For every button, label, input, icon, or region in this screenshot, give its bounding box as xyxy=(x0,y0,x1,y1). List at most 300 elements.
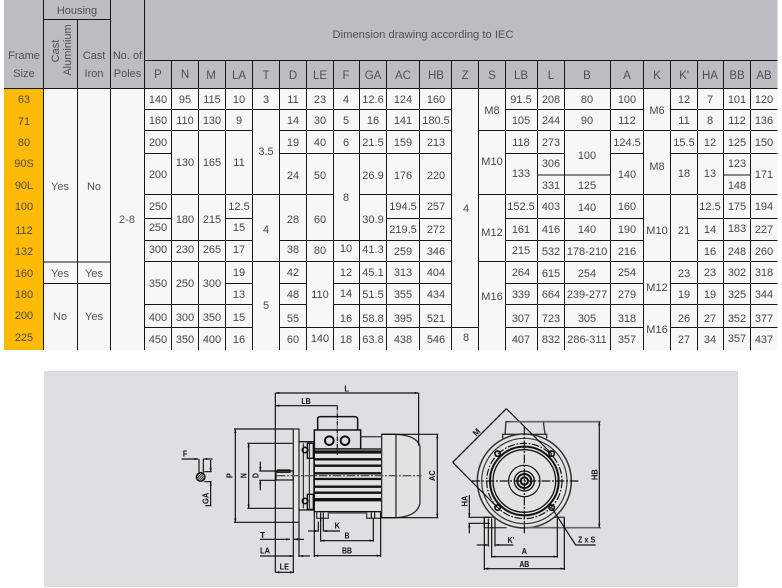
terminal box xyxy=(314,417,382,449)
values: T to HB: 30.9 xyxy=(362,214,384,226)
values: P to LA: 15 xyxy=(233,222,245,234)
values: T to HB: 16 xyxy=(340,313,352,325)
front view dimension lines xyxy=(453,409,601,570)
values: T to HB: 51.5 xyxy=(362,289,384,301)
values: T to HB: 355 xyxy=(394,289,412,301)
side view dimension labels: BB xyxy=(342,546,352,556)
side view dimension labels: L xyxy=(344,383,350,393)
values: Z to A: 216 xyxy=(618,246,636,258)
values: P to LA: 15 xyxy=(233,312,245,324)
side view dimension labels: LE xyxy=(280,561,289,571)
diagram: side view of motor xyxy=(182,383,438,572)
frame sizes: 180 xyxy=(15,289,33,301)
values: T to HB: 159 xyxy=(394,137,412,149)
column headers: AB xyxy=(756,70,772,82)
values: Z to A: M12 xyxy=(481,227,503,239)
values: T to HB: 176 xyxy=(394,170,412,182)
values: P to LA: 160 xyxy=(149,115,167,127)
values: P to LA: 11 xyxy=(233,157,245,169)
values: T to HB: 219.5 xyxy=(389,224,417,236)
values: P to LA: 12.5 xyxy=(228,201,250,213)
column headers: K xyxy=(653,70,661,82)
side view dimension labels: T xyxy=(260,530,266,540)
values: P to LA: 200 xyxy=(149,137,167,149)
values: Z to A: 318 xyxy=(618,313,636,325)
values: K to AB: 148 xyxy=(728,180,746,192)
values: Z to A: 215 xyxy=(512,245,530,257)
values: T to HB: 521 xyxy=(427,313,445,325)
values: Z to A: 339 xyxy=(512,289,530,301)
housing and poles values: 2-8 xyxy=(119,214,135,226)
values: Z to A: 279 xyxy=(618,289,636,301)
values: K to AB: 248 xyxy=(728,246,746,258)
values: T to HB: 141 xyxy=(394,115,412,127)
values: T to HB: 438 xyxy=(394,334,412,346)
column headers: LB xyxy=(514,70,528,82)
values: T to HB: 434 xyxy=(427,289,445,301)
values: P to LA: 350 xyxy=(203,312,221,324)
values: P to LA: 350 xyxy=(176,334,194,346)
values: Z to A: 4 xyxy=(463,203,469,215)
values: T to HB: 11 xyxy=(287,94,299,106)
column headers: AC xyxy=(395,70,411,82)
table: dimensions xyxy=(4,0,778,350)
values: T to HB: 5 xyxy=(263,300,269,312)
side view dimension labels: LB xyxy=(301,396,311,406)
values: K to AB: 437 xyxy=(755,334,773,346)
side view dimension labels: P xyxy=(225,473,235,478)
column headers: Z xyxy=(461,70,469,82)
values: Z to A: 307 xyxy=(512,313,530,325)
frame sizes: 100 xyxy=(15,201,33,213)
column headers: T xyxy=(262,70,270,82)
values: K to AB: 125 xyxy=(728,137,746,149)
grid lines xyxy=(4,0,778,350)
values: P to LA: 250 xyxy=(176,278,194,290)
frame sizes: 112 xyxy=(15,225,33,237)
values: T to HB: 55 xyxy=(287,313,299,325)
values: Z to A: 273 xyxy=(542,137,560,149)
values: K to AB: 23 xyxy=(704,267,716,279)
values: Z to A: 723 xyxy=(542,313,560,325)
front view dimension labels: Z x S xyxy=(578,534,596,544)
table body background xyxy=(44,88,778,350)
values: T to HB: 3 xyxy=(263,94,269,106)
values: T to HB: 16 xyxy=(367,115,379,127)
values: Z to A: M10 xyxy=(481,156,503,168)
frame sizes: 71 xyxy=(18,116,30,128)
column headers: LA xyxy=(232,70,246,82)
values: K to AB: 150 xyxy=(755,137,773,149)
values: T to HB: 110 xyxy=(311,289,329,301)
values: P to LA: 10 xyxy=(233,94,245,106)
values: Z to A: 90 xyxy=(581,115,593,127)
values: Z to A: 160 xyxy=(618,201,636,213)
values: T to HB: 180.5 xyxy=(422,115,450,127)
column headers: F xyxy=(342,70,350,82)
column headers: A xyxy=(623,70,631,82)
values: P to LA xyxy=(149,94,250,346)
values: T to HB: 140 xyxy=(311,333,329,345)
header labels: housing, frame, poles: Cast xyxy=(83,50,105,62)
flange rings xyxy=(477,434,571,528)
values: K to AB: 19 xyxy=(704,289,716,301)
housing and poles values: Yes xyxy=(51,181,69,193)
values: T to HB: 24 xyxy=(287,170,299,182)
values: T to HB: 259 xyxy=(394,246,412,258)
header labels: housing, frame, poles: Size xyxy=(13,68,35,80)
side view dimension labels: D xyxy=(250,473,260,478)
values: K to AB: 344 xyxy=(755,289,773,301)
values: K to AB: 260 xyxy=(755,246,773,258)
front view dimension labels: HA xyxy=(459,495,469,506)
values: T to HB: 60 xyxy=(287,334,299,346)
values: T to HB: 48 xyxy=(287,289,299,301)
values: K to AB: M8 xyxy=(649,161,665,173)
values: Z to A: M16 xyxy=(481,291,503,303)
column headers: D xyxy=(289,70,297,82)
values: K to AB: 7 xyxy=(707,94,713,106)
values: Z to A: 416 xyxy=(542,224,560,236)
values: Z to A: 254 xyxy=(578,268,596,280)
values: K to AB xyxy=(646,94,773,346)
values: T to HB xyxy=(258,94,450,346)
front view dimension labels: A xyxy=(522,546,528,556)
centre lines xyxy=(472,427,578,533)
values: T to HB: 8 xyxy=(343,192,349,204)
side view dimension labels: B xyxy=(344,531,349,541)
values: T to HB: 272 xyxy=(427,224,445,236)
values: P to LA: 450 xyxy=(149,334,167,346)
front view dimension labels: K' xyxy=(508,535,514,545)
values: K to AB: 12 xyxy=(704,137,716,149)
values: Z to A: 532 xyxy=(542,246,560,258)
values: K to AB: 302 xyxy=(728,267,746,279)
values: P to LA: 130 xyxy=(203,115,221,127)
values: P to LA: 130 xyxy=(176,157,194,169)
values: T to HB: 12 xyxy=(340,267,352,279)
values: Z to A: M8 xyxy=(484,105,500,117)
values: Z to A: 91.5 xyxy=(510,94,532,106)
values: K to AB: M10 xyxy=(646,225,668,237)
column headers: LE xyxy=(313,70,327,82)
values: T to HB: 404 xyxy=(427,267,445,279)
side view dimension labels: F xyxy=(183,449,187,459)
values: P to LA: 165 xyxy=(203,157,221,169)
column headers xyxy=(154,69,772,82)
values: Z to A: 152.5 xyxy=(507,201,535,213)
bolt holes xyxy=(495,451,554,510)
values: K to AB: 377 xyxy=(755,313,773,325)
values: Z to A: 407 xyxy=(512,334,530,346)
values: K to AB: 12 xyxy=(678,94,690,106)
values: P to LA: 400 xyxy=(203,334,221,346)
housing and poles values: No xyxy=(53,311,67,323)
values: K to AB: 227 xyxy=(755,224,773,236)
column headers: K' xyxy=(679,70,689,82)
housing and poles values: Yes xyxy=(85,311,103,323)
values: Z to A: 140 xyxy=(578,224,596,236)
values: Z to A: 254 xyxy=(618,267,636,279)
values: K to AB: 19 xyxy=(678,289,690,301)
values: Z to A: 124.5 xyxy=(613,137,641,149)
values: P to LA: 300 xyxy=(149,244,167,256)
values: Z to A xyxy=(463,94,641,346)
column headers: L xyxy=(548,70,555,82)
values: Z to A: 125 xyxy=(578,180,596,192)
values: K to AB: 194 xyxy=(755,201,773,213)
values: Z to A: 403 xyxy=(542,201,560,213)
values: Z to A: 664 xyxy=(542,289,560,301)
side view dimension labels: K xyxy=(335,521,341,531)
cooling fins xyxy=(314,449,382,512)
values: T to HB: 38 xyxy=(287,244,299,256)
values: Z to A: 133 xyxy=(512,168,530,180)
values: T to HB: 18 xyxy=(340,334,352,346)
values: T to HB: 45.1 xyxy=(362,267,384,279)
column headers: B xyxy=(583,70,591,82)
values: T to HB: 12.6 xyxy=(362,94,384,106)
values: Z to A: 190 xyxy=(618,224,636,236)
values: K to AB: 183 xyxy=(728,223,746,235)
header labels: housing, frame, poles: Iron xyxy=(85,68,103,80)
values: Z to A: 80 xyxy=(581,94,593,106)
values: Z to A: 239-277 xyxy=(567,289,607,301)
housing and poles values: Yes xyxy=(85,268,103,280)
values: T to HB: 160 xyxy=(427,94,445,106)
values: K to AB: 34 xyxy=(704,334,716,346)
column headers: HA xyxy=(702,70,718,82)
values: Z to A: 100 xyxy=(578,150,596,162)
header background xyxy=(4,0,778,88)
values: T to HB: 23 xyxy=(314,94,326,106)
terminal box outline xyxy=(503,422,547,438)
values: K to AB: 18 xyxy=(678,168,690,180)
side view dimension labels: AC xyxy=(427,470,437,481)
side view dimension labels: N xyxy=(238,473,248,478)
values: K to AB: 13 xyxy=(704,168,716,180)
values: K to AB: 175 xyxy=(728,201,746,213)
values: Z to A: 8 xyxy=(463,332,469,344)
values: P to LA: 215 xyxy=(203,214,221,226)
values: T to HB: 19 xyxy=(287,137,299,149)
values: T to HB: 213 xyxy=(427,137,445,149)
values: P to LA: 95 xyxy=(179,94,191,106)
column headers: GA xyxy=(365,70,382,82)
values: T to HB: 124 xyxy=(394,94,412,106)
values: T to HB: 5 xyxy=(343,115,349,127)
frame size column background xyxy=(4,88,44,350)
values: P to LA: 200 xyxy=(149,169,167,181)
values: K to AB: 15.5 xyxy=(673,137,695,149)
values: K to AB: 27 xyxy=(704,313,716,325)
values: Z to A: 615 xyxy=(542,268,560,280)
panel: drawing background xyxy=(44,371,738,587)
values: T to HB: 63.8 xyxy=(362,334,384,346)
frame sizes: 200 xyxy=(15,310,33,322)
values: P to LA: 13 xyxy=(233,289,245,301)
values: K to AB: 352 xyxy=(728,313,746,325)
column headers: BB xyxy=(729,70,745,82)
values: K to AB: 26 xyxy=(678,313,690,325)
values: Z to A: 178-210 xyxy=(567,246,607,258)
values: P to LA: 400 xyxy=(149,312,167,324)
column headers: M xyxy=(206,70,216,82)
column headers: N xyxy=(181,69,189,81)
header labels: housing, frame, poles: Poles xyxy=(114,68,142,80)
values: K to AB: 8 xyxy=(707,115,713,127)
values: P to LA: 110 xyxy=(176,115,194,127)
values: Z to A: 357 xyxy=(618,334,636,346)
frame sizes: 90L xyxy=(15,180,33,192)
frame sizes: 160 xyxy=(15,268,33,280)
values: K to AB: 21 xyxy=(678,225,690,237)
side view dimension labels: GA xyxy=(200,492,210,504)
header labels: housing, frame, poles: Frame xyxy=(8,50,40,62)
header labels: housing, frame, poles xyxy=(8,5,143,80)
values: K to AB: 123 xyxy=(728,158,746,170)
values: K to AB: 120 xyxy=(755,94,773,106)
values: K to AB: 101 xyxy=(728,94,746,106)
side view dimension labels xyxy=(183,383,437,571)
header labels: housing, frame, poles: Housing xyxy=(57,5,97,17)
values: P to LA: 300 xyxy=(203,278,221,290)
values: Z to A: 208 xyxy=(542,94,560,106)
values: T to HB: 4 xyxy=(263,224,269,236)
values: Z to A: 264 xyxy=(512,267,530,279)
values: P to LA: 300 xyxy=(176,312,194,324)
values: P to LA: 16 xyxy=(233,334,245,346)
dimension lines xyxy=(182,393,438,572)
values: P to LA: 180 xyxy=(176,214,194,226)
values: Z to A: 105 xyxy=(512,115,530,127)
housing and poles values xyxy=(51,181,135,323)
values: T to HB: 80 xyxy=(314,245,326,257)
values: Z to A: 305 xyxy=(578,313,596,325)
frame sizes: 132 xyxy=(15,246,33,258)
values: K to AB: M16 xyxy=(646,324,668,336)
feet xyxy=(317,512,381,522)
values: P to LA: 19 xyxy=(233,267,245,279)
values: K to AB: 12.5 xyxy=(699,201,721,213)
values: T to HB: 58.8 xyxy=(362,313,384,325)
frame sizes: 63 xyxy=(18,94,30,106)
front view dimension labels xyxy=(459,426,599,569)
values: K to AB: 27 xyxy=(678,334,690,346)
header labels: housing, frame, poles: Aluminium xyxy=(62,24,74,76)
values: T to HB: 395 xyxy=(394,313,412,325)
values: Z to A: 286-311 xyxy=(567,334,607,346)
values: K to AB: M12 xyxy=(646,282,668,294)
values: P to LA: 250 xyxy=(149,201,167,213)
heading: dimension drawing: Dimension drawing according to IEC xyxy=(333,29,513,41)
shaft and key xyxy=(276,470,293,480)
values: P to LA: 350 xyxy=(149,278,167,290)
values: Z to A: 118 xyxy=(512,137,530,149)
values: T to HB: 41.3 xyxy=(362,244,384,256)
values: K to AB: 23 xyxy=(678,268,690,280)
values: T to HB: 26.9 xyxy=(362,170,384,182)
header labels: housing, frame, poles: Cast xyxy=(50,40,62,62)
values: P to LA: 9 xyxy=(236,115,242,127)
values: P to LA: 265 xyxy=(203,244,221,256)
values: K to AB: M6 xyxy=(649,105,665,117)
values: Z to A: 140 xyxy=(618,169,636,181)
values: T to HB: 3.5 xyxy=(258,146,274,158)
values: Z to A: 306 xyxy=(542,158,560,170)
values: K to AB: 325 xyxy=(728,289,746,301)
values: P to LA: 250 xyxy=(149,222,167,234)
front view dimension labels: AB xyxy=(519,559,529,569)
housing and poles values: No xyxy=(87,181,101,193)
values: K to AB: 171 xyxy=(755,169,773,181)
column headers: HB xyxy=(428,70,444,82)
values: K to AB: 357 xyxy=(728,333,746,345)
values: Z to A: 161 xyxy=(512,224,530,236)
values: K to AB: 14 xyxy=(704,224,716,236)
values: K to AB: 11 xyxy=(678,115,690,127)
values: K to AB: 136 xyxy=(755,115,773,127)
values: T to HB: 257 xyxy=(427,201,445,213)
header labels: housing, frame, poles: No. of xyxy=(113,50,143,62)
values: T to HB: 6 xyxy=(343,137,349,149)
fan cowl xyxy=(382,434,420,518)
diagram: front view of motor xyxy=(453,409,601,570)
frame sizes: 90S xyxy=(14,158,34,170)
values: T to HB: 220 xyxy=(427,170,445,182)
shaft cross-section xyxy=(196,473,205,481)
frame sizes xyxy=(14,94,34,344)
values: P to LA: 230 xyxy=(176,244,194,256)
values: K to AB: 318 xyxy=(755,267,773,279)
values: T to HB: 313 xyxy=(394,267,412,279)
values: P to LA: 17 xyxy=(233,244,245,256)
column headers: P xyxy=(154,69,162,81)
values: Z to A: 832 xyxy=(542,334,560,346)
side view dimension labels: LA xyxy=(260,546,271,556)
values: T to HB: 60 xyxy=(314,214,326,226)
frame sizes: 80 xyxy=(18,137,30,149)
values: Z to A: 331 xyxy=(542,180,560,192)
front view dimension labels: M xyxy=(471,426,482,438)
values: T to HB: 30 xyxy=(314,115,326,127)
values: Z to A: 244 xyxy=(542,115,560,127)
values: Z to A: 100 xyxy=(618,94,636,106)
values: T to HB: 14 xyxy=(340,288,352,300)
values: P to LA: 115 xyxy=(203,94,221,106)
values: K to AB: 112 xyxy=(728,115,746,127)
flange and bearing shield xyxy=(293,429,314,522)
values: P to LA: 140 xyxy=(149,94,167,106)
values: T to HB: 10 xyxy=(340,243,352,255)
values: T to HB: 21.5 xyxy=(362,137,384,149)
values: Z to A: 112 xyxy=(618,115,636,127)
values: K to AB: 16 xyxy=(704,246,716,258)
values: T to HB: 40 xyxy=(314,137,326,149)
values: T to HB: 42 xyxy=(287,267,299,279)
values: T to HB: 14 xyxy=(287,115,299,127)
values: Z to A: 140 xyxy=(578,202,596,214)
housing and poles values: Yes xyxy=(51,268,69,280)
centre line xyxy=(277,474,422,478)
values: T to HB: 50 xyxy=(314,170,326,182)
values: T to HB: 546 xyxy=(427,334,445,346)
values: T to HB: 4 xyxy=(343,94,349,106)
values: T to HB: 346 xyxy=(427,246,445,258)
frame sizes: 225 xyxy=(15,332,33,344)
feet outline xyxy=(484,517,564,528)
values: T to HB: 28 xyxy=(287,214,299,226)
